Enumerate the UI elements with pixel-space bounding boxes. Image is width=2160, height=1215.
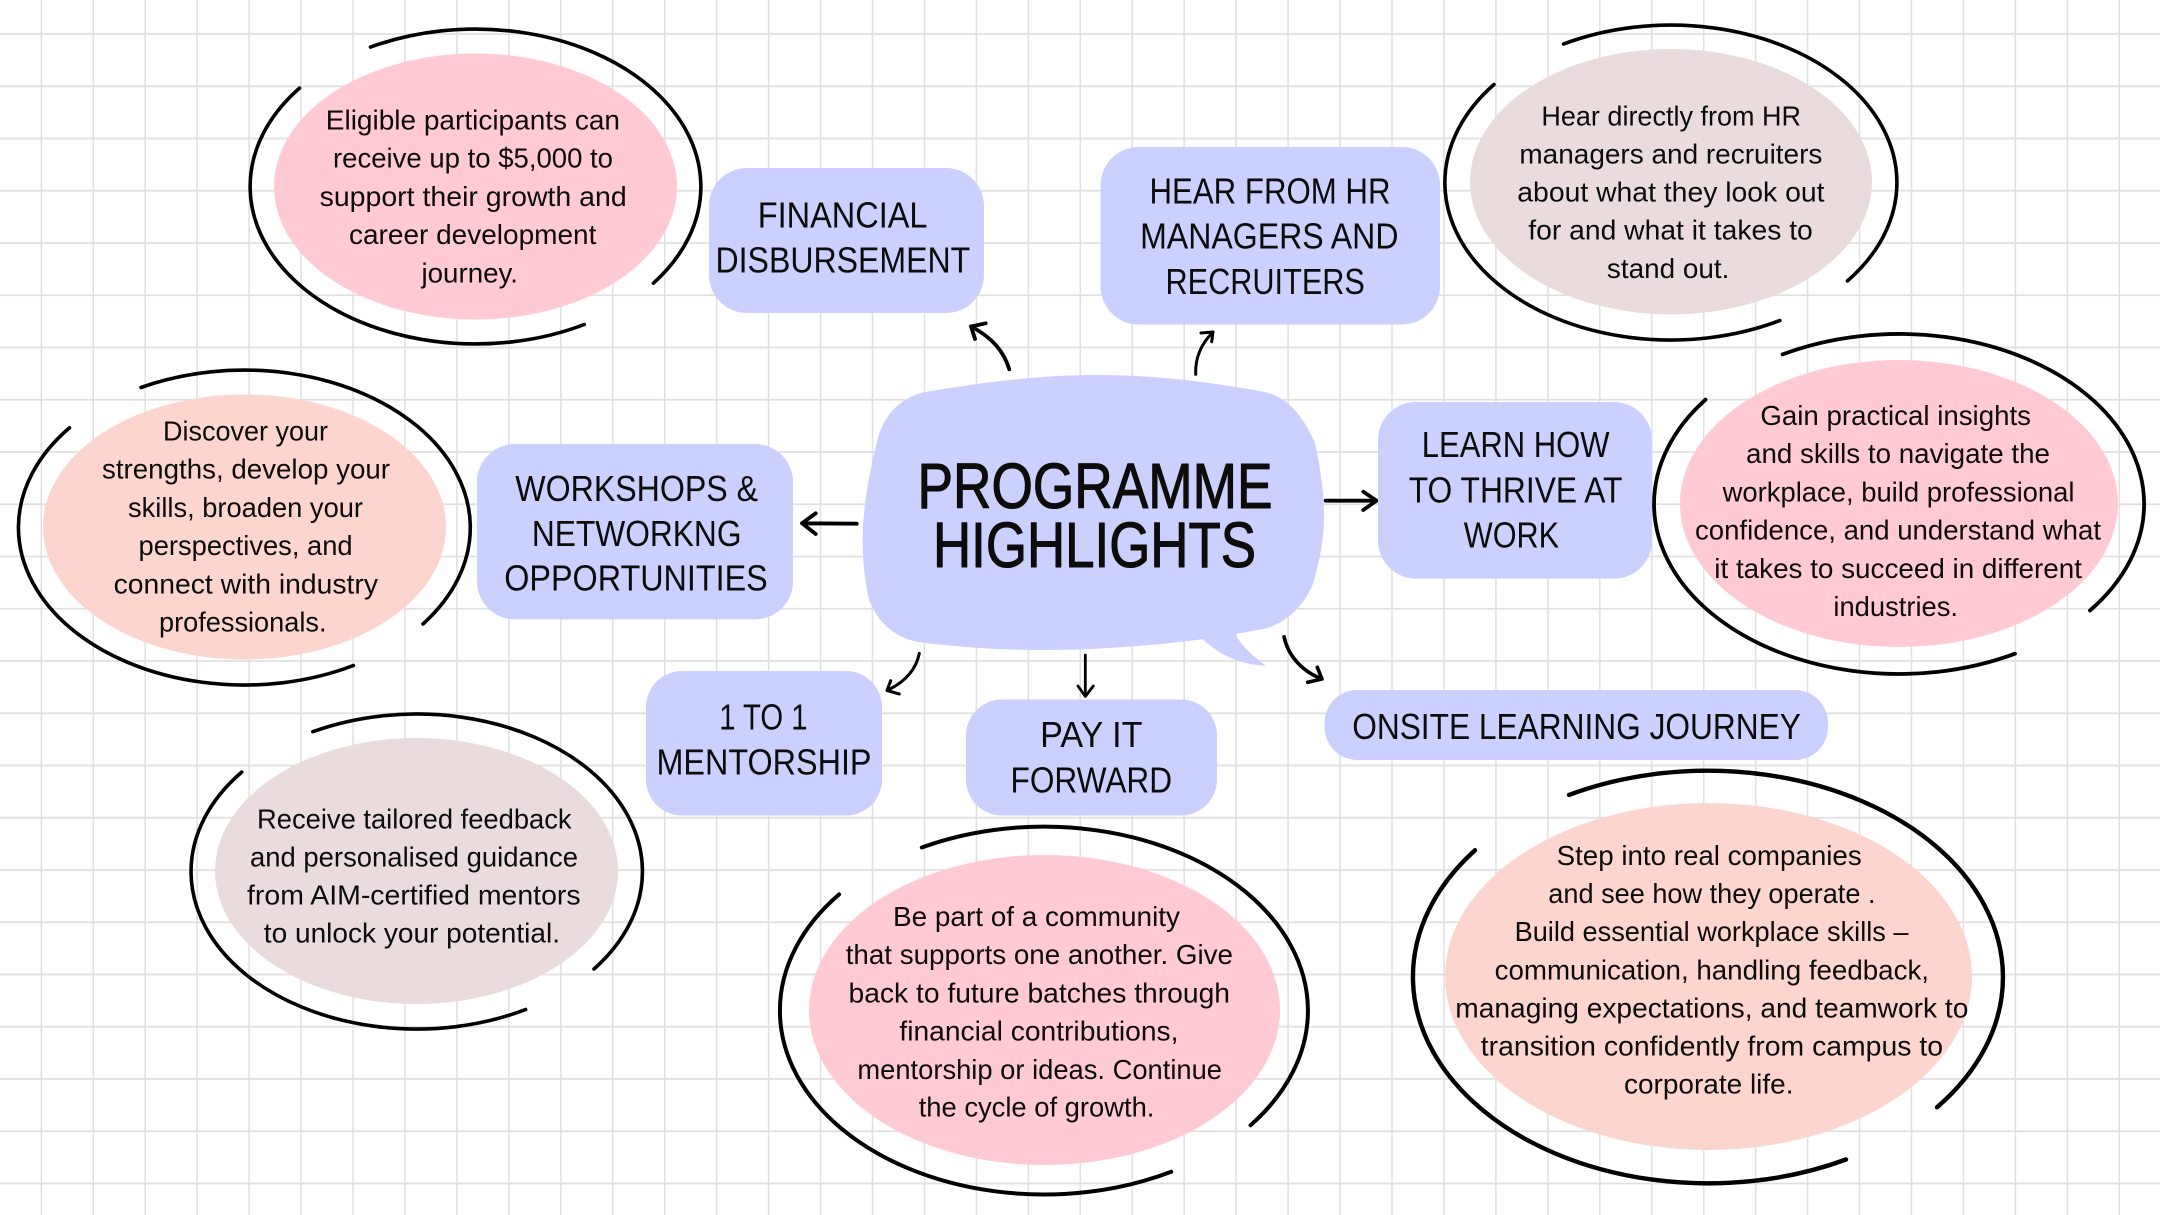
heading: pay it forward: [1010, 714, 1172, 800]
text: be part of a community: that supports one another. Give: [846, 939, 1233, 970]
panel: workshops and networking: [477, 444, 793, 619]
panel: learn how to thrive at work: [1378, 402, 1652, 579]
arrow: to 1 to 1 mentorship: [887, 653, 919, 694]
text: step into real companies: communication, handling feedback,: [1495, 954, 1929, 985]
heading: 1 to 1 mentorship: 1 TO 1: [719, 696, 808, 738]
text: discover your strengths: [102, 416, 390, 638]
text: gain practical insights: [1695, 400, 2101, 622]
heading: pay it forward: FORWARD: [1010, 760, 1172, 800]
text: eligible participants: career development: [349, 219, 597, 250]
title: PROGRAMME: [918, 450, 1272, 522]
callout: hear directly from HR: [1445, 25, 1897, 340]
text: discover your strengths: Discover your: [163, 416, 328, 446]
heading: 1 to 1 mentorship: [656, 696, 872, 783]
text: discover your strengths: connect with industry: [114, 568, 378, 599]
heading: workshops and networking: NETWORKNG: [532, 513, 742, 554]
text: gain practical insights: Gain practical insights: [1760, 400, 2031, 431]
text: discover your strengths: perspectives, and: [138, 530, 353, 561]
text: hear directly from HR: stand out.: [1607, 253, 1729, 284]
callout: eligible participants: [250, 29, 701, 344]
text: eligible participants: support their growth and: [320, 181, 627, 212]
text: step into real companies: [1455, 840, 1968, 1100]
heading: learn how to thrive at work: TO THRIVE AT: [1409, 470, 1622, 511]
heading: financial disbursement: DISBURSEMENT: [716, 239, 970, 280]
text: receive tailored feedback: and personalised guidance: [250, 842, 578, 873]
text: eligible participants: receive up to $5,000 to: [333, 143, 613, 174]
text: receive tailored feedback: Receive tailored feedback: [257, 804, 573, 835]
heading: workshops and networking: OPPORTUNITIES: [504, 558, 768, 599]
heading: learn how to thrive at work: WORK: [1464, 514, 1559, 556]
heading: pay it forward: PAY IT: [1040, 714, 1142, 755]
text: eligible participants: journey.: [421, 257, 518, 288]
arrow: to financial disbursement: [971, 323, 1009, 369]
text: step into real companies: Step into real companies: [1557, 840, 1862, 871]
text: hear directly from HR: managers and recruiters: [1519, 138, 1822, 169]
heading: hear from HR: MANAGERS AND: [1140, 216, 1398, 257]
text: gain practical insights: it takes to succeed in different: [1714, 553, 2082, 584]
text: hear directly from HR: about what they look out: [1517, 176, 1825, 208]
text: discover your strengths: skills, broaden your: [128, 492, 363, 523]
text: step into real companies: Build essential workplace skills –: [1515, 916, 1909, 947]
text: be part of a community: Be part of a community: [893, 901, 1180, 932]
heading: 1 to 1 mentorship: MENTORSHIP: [656, 742, 872, 783]
callout: receive tailored feedback: [191, 714, 642, 1029]
text: receive tailored feedback: to unlock your potential.: [264, 918, 560, 949]
title: [918, 450, 1272, 581]
text: eligible participants: [320, 104, 627, 288]
heading: hear from HR: [1140, 170, 1398, 302]
bubble shape: [863, 375, 1324, 666]
heading: workshops and networking: [504, 468, 768, 599]
text: be part of a community: [846, 901, 1233, 1123]
heading: financial disbursement: FINANCIAL: [758, 195, 928, 236]
text: eligible participants: Eligible participants can: [326, 104, 620, 136]
central speech bubble: programme highlights: [863, 375, 1324, 666]
heading: financial disbursement: [716, 195, 970, 280]
title: HIGHLIGHTS: [933, 509, 1256, 581]
panel: onsite learning journey: [1324, 690, 1828, 760]
arrow: to hear from HR: [1196, 332, 1213, 374]
heading: learn how to thrive at work: [1409, 424, 1622, 556]
callout: be part of a community: [780, 827, 1308, 1194]
text: step into real companies: corporate life.: [1624, 1069, 1794, 1100]
text: be part of a community: mentorship or ideas. Continue: [857, 1054, 1222, 1085]
text: be part of a community: back to future batches through: [848, 977, 1230, 1008]
text: gain practical insights: industries.: [1833, 591, 1958, 622]
heading: workshops and networking: WORKSHOPS &: [515, 468, 758, 509]
panel: hear from HR managers and recruiters: [1101, 147, 1440, 324]
text: step into real companies: and see how they operate .: [1548, 878, 1876, 909]
text: hear directly from HR: Hear directly from HR: [1541, 100, 1801, 131]
text: gain practical insights: workplace, build professional: [1722, 476, 2074, 507]
arrow: to pay it forward: [1078, 655, 1093, 696]
text: step into real companies: transition confidently from campus to: [1481, 1030, 1943, 1062]
text: step into real companies: managing expectations, and teamwork to: [1455, 992, 1968, 1023]
text: be part of a community: the cycle of growth.: [919, 1092, 1154, 1123]
text: receive tailored feedback: [247, 804, 581, 949]
heading: learn how to thrive at work: LEARN HOW: [1422, 424, 1610, 465]
callout: step into real companies: [1413, 771, 2003, 1183]
panel: financial disbursement: [709, 168, 984, 313]
text: gain practical insights: confidence, and understand what: [1695, 515, 2101, 546]
heading: hear from HR: HEAR FROM HR: [1150, 170, 1390, 212]
arrow: to learn how to thrive: [1326, 492, 1376, 510]
text: discover your strengths: professionals.: [159, 606, 326, 638]
text: hear directly from HR: [1517, 100, 1825, 284]
callout: gain practical insights: [1654, 334, 2144, 674]
heading: onsite learning journey: ONSITE LEARNING JOURNEY: [1352, 706, 1801, 747]
arrow: to onsite learning journey: [1284, 637, 1322, 682]
text: be part of a community: financial contributions,: [899, 1016, 1178, 1047]
panel: pay it forward: [966, 700, 1217, 816]
arrow: to workshops and networking: [802, 513, 857, 534]
text: hear directly from HR: for and what it takes to: [1528, 215, 1813, 246]
text: receive tailored feedback: from AIM-certified mentors: [247, 880, 581, 911]
heading: hear from HR: RECRUITERS: [1166, 261, 1365, 302]
text: discover your strengths: strengths, develop your: [102, 454, 390, 485]
callout: discover your strengths: [18, 370, 470, 685]
text: gain practical insights: and skills to navigate the: [1746, 438, 2050, 469]
panel: 1 to 1 mentorship: [646, 671, 882, 816]
